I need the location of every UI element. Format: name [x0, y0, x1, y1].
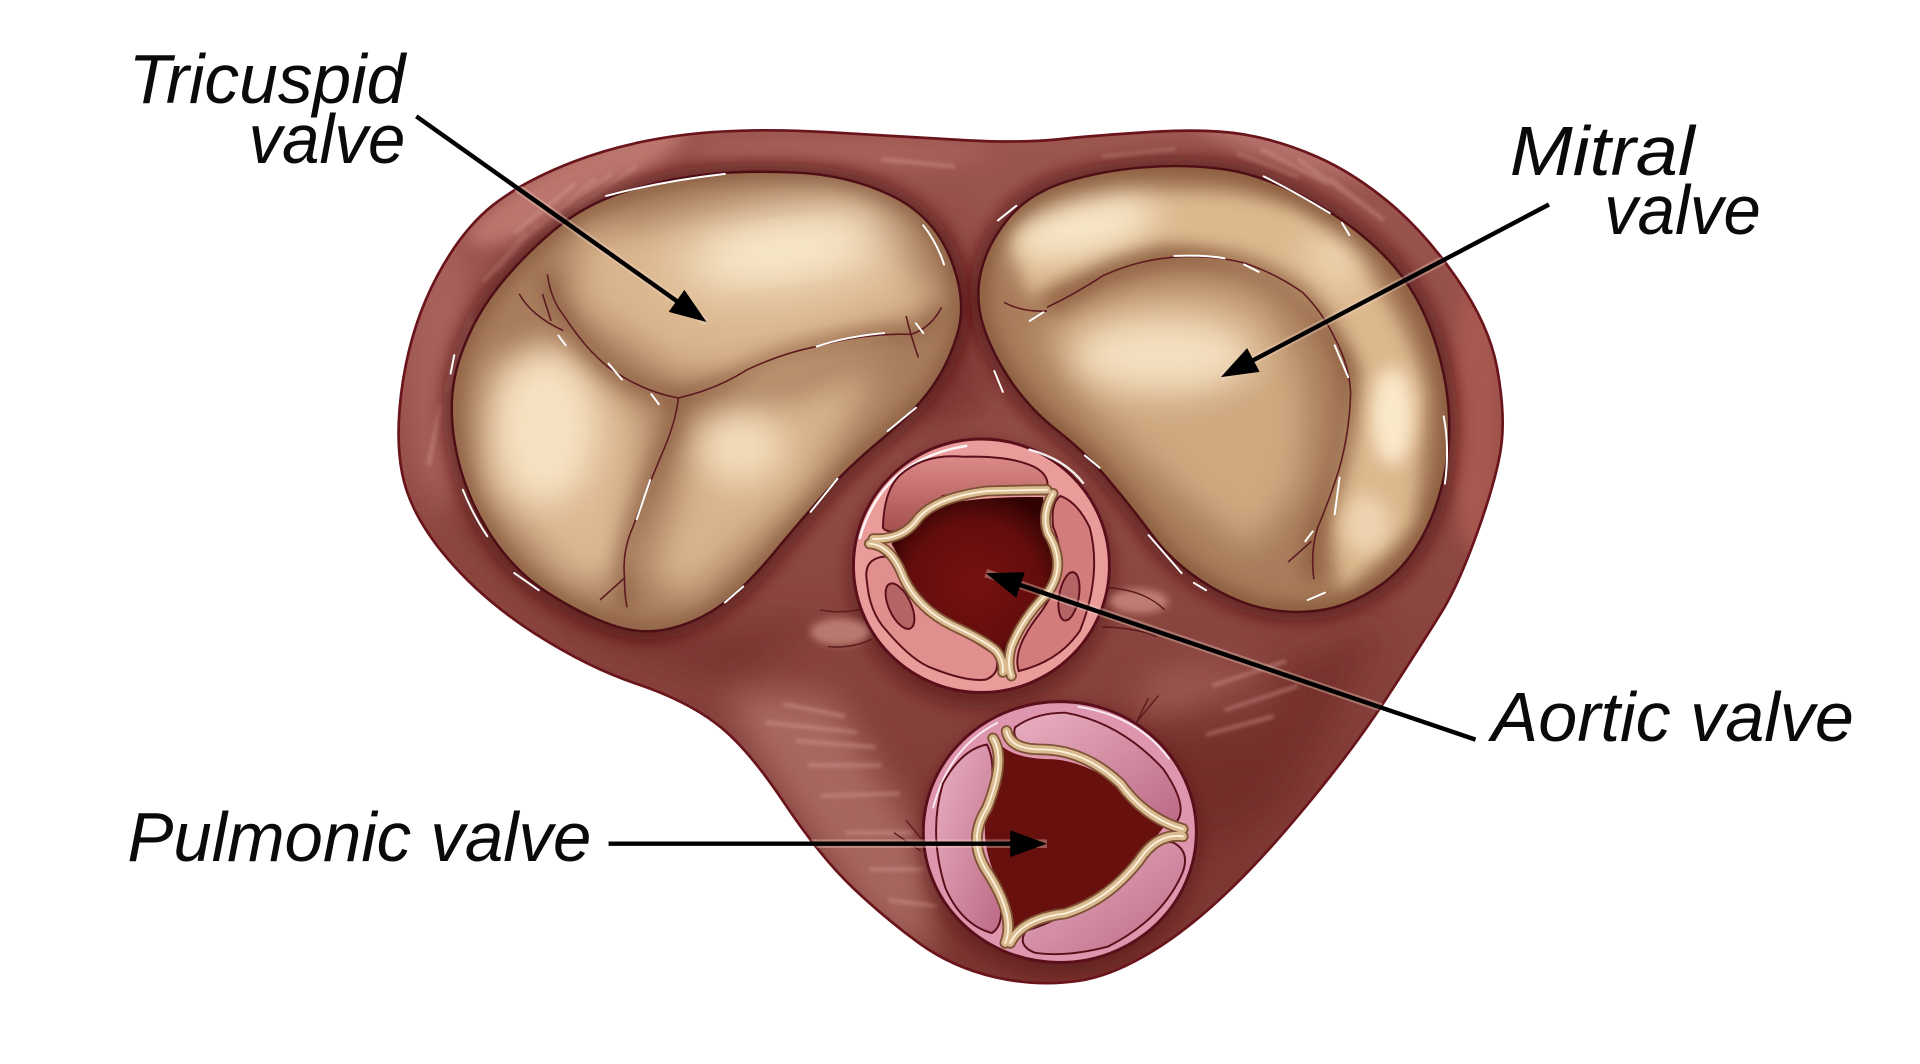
label: mitral valve: Mitral [1510, 112, 1697, 190]
mitral valve [978, 166, 1449, 612]
aortic leaflet edges [869, 490, 1058, 676]
label: tricuspid valve: Tricuspid [129, 40, 407, 118]
aortic ring [853, 439, 1109, 692]
pulmonic opening [985, 746, 1163, 934]
pulmonic cusps [936, 713, 1185, 954]
label: tricuspid valve: valve [249, 100, 405, 178]
pulmonic valve [923, 702, 1196, 962]
label: mitral valve: valve [1604, 171, 1761, 249]
arrow: mitral [1221, 205, 1549, 377]
aortic cusps [866, 456, 1094, 680]
white flecks on tricuspid [451, 174, 944, 602]
label: tricuspid valve [129, 40, 407, 178]
tricuspid valve [451, 172, 961, 631]
white flecks on mitral [994, 176, 1447, 600]
arrow: aortic [986, 572, 1476, 740]
label: mitral valve [1510, 112, 1761, 249]
aortic valve [853, 439, 1109, 692]
label: pulmonic valve: Pulmonic valve [127, 798, 591, 876]
aortic opening [891, 497, 1057, 655]
label: aortic valve: Aortic valve [1487, 678, 1854, 756]
pulmonic leaflet edges [977, 731, 1183, 943]
illustration: heart valves seen from above [130, 52, 1852, 984]
arrow halos inside the heart [514, 186, 1446, 848]
dark shadow around valves [452, 172, 961, 631]
pulmonic ring [923, 702, 1196, 962]
arrow: tricuspid [416, 116, 707, 322]
rim streaks [429, 149, 1384, 906]
arrow: pulmonic [609, 830, 1047, 857]
heart base: outer fibrous tissue [399, 102, 1503, 983]
